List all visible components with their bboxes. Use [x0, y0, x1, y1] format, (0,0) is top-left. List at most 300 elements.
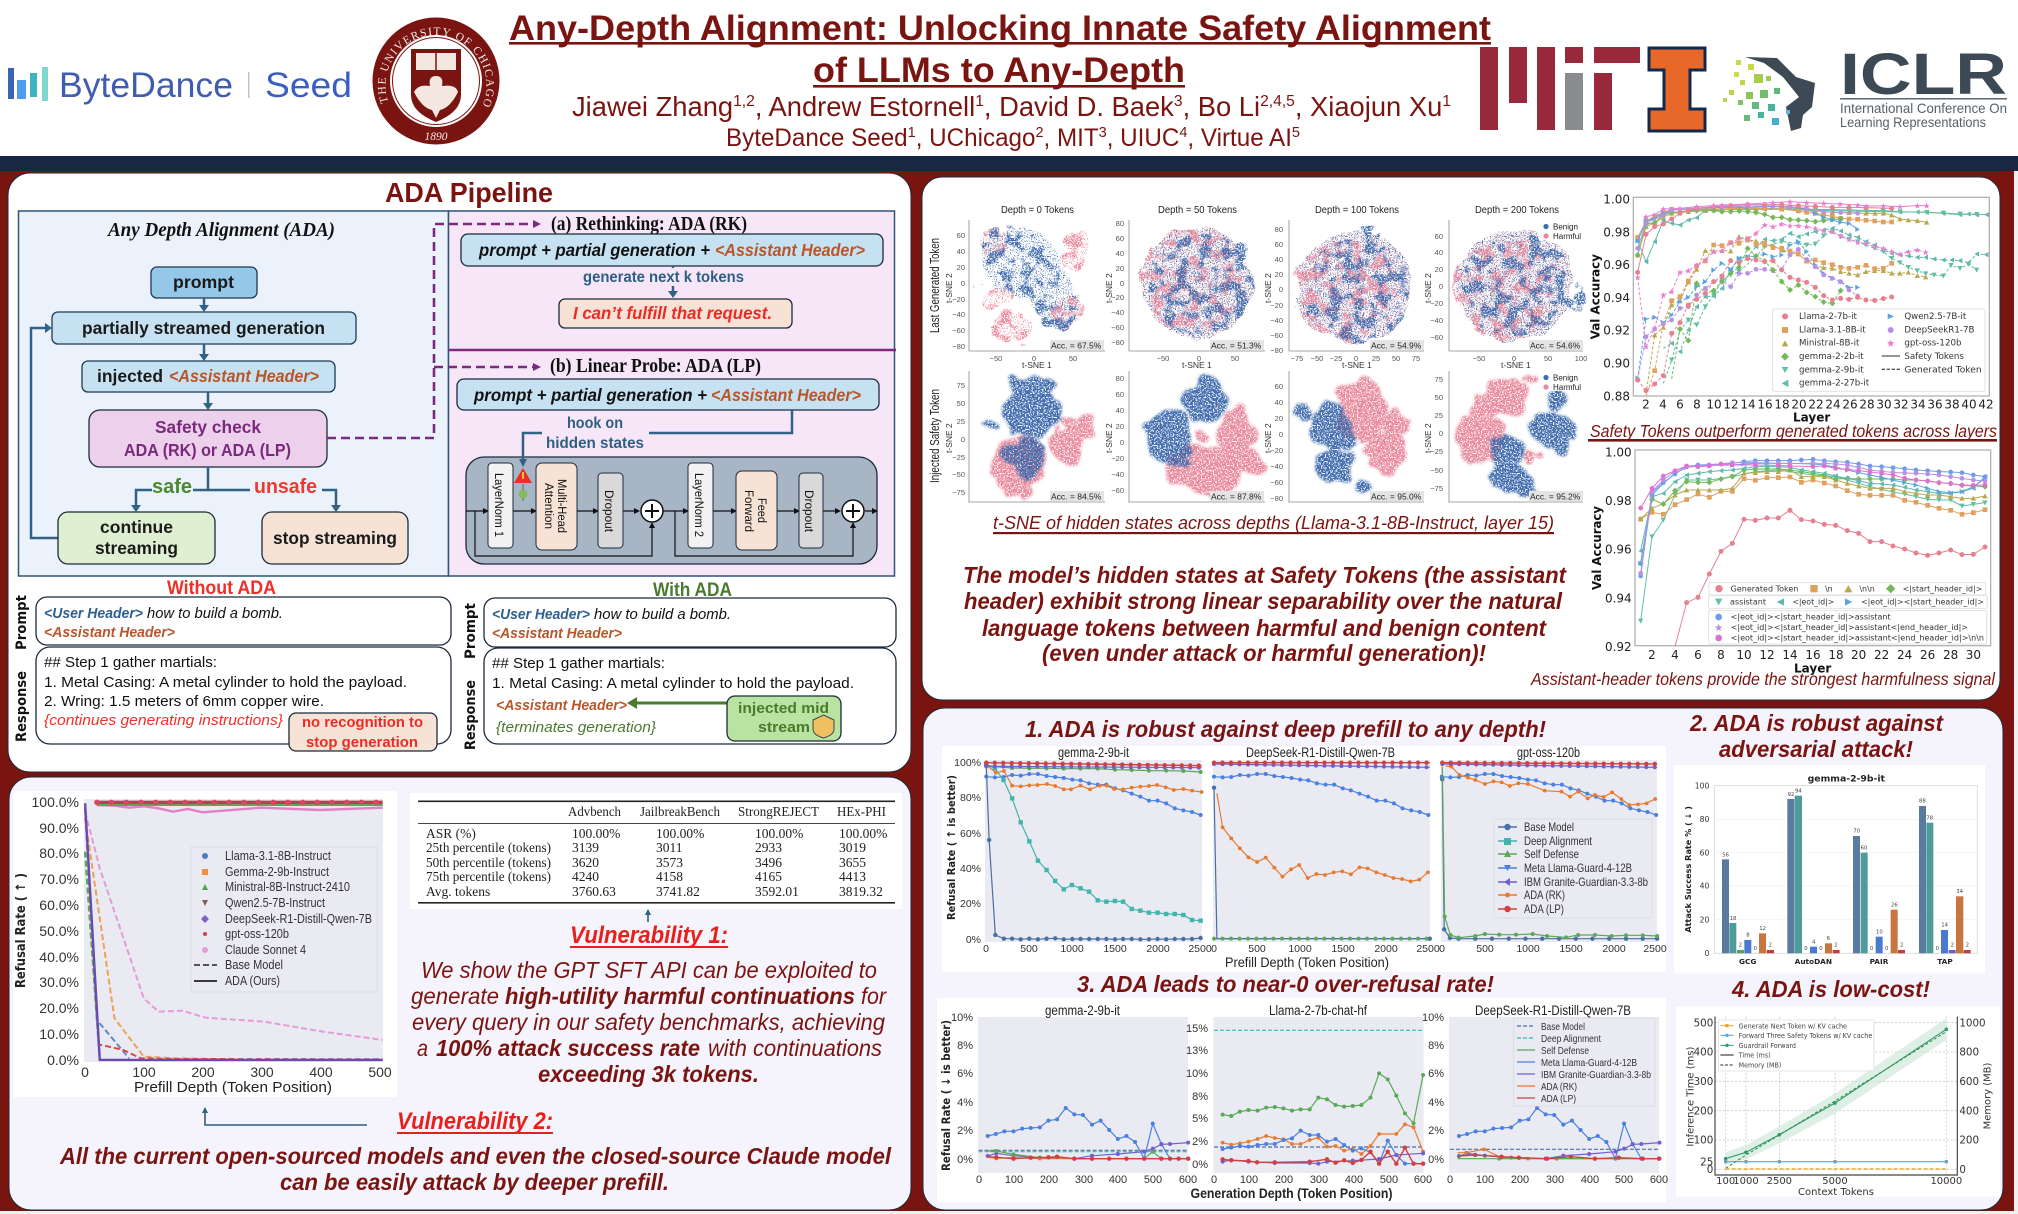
- tick labels: 50: [1435, 393, 1443, 402]
- y ticks: 10%: [951, 1012, 973, 1024]
- legend: gpt-oss-120b: [1904, 339, 1962, 349]
- authors: 3: [1174, 93, 1183, 110]
- label: Response: Response: [14, 671, 30, 742]
- legend: ADA (RK): [1541, 1081, 1577, 1093]
- logo: University of Chicago seal: THE UNIVERSITY OF CHICAGO: [378, 27, 494, 107]
- label: hook on hidden states: [546, 415, 644, 452]
- box: LP input: <Assistant Header>: [711, 385, 861, 405]
- tick labels: −40: [1111, 470, 1124, 479]
- label: generate next k tokens: generate next k tokens: [583, 269, 744, 286]
- text: vulnerability 2 description: All the current open-sourced models and even the closed-source Claude model: [59, 1143, 892, 1169]
- tick labels: 18: [1828, 648, 1844, 662]
- text: vulnerability 1 description: with continuations: [708, 1035, 882, 1061]
- axis titles: Inference Time (ms): [1685, 1047, 1696, 1147]
- group: GCG bars: [1722, 859, 1774, 953]
- text: vulnerability 1 description: every query in our safety benchmarks, achieving: [412, 1009, 885, 1035]
- y ticks: 10%: [1186, 1068, 1208, 1080]
- chart: t-SNE grid: 50: [1544, 354, 1552, 363]
- bar values: 92: [1788, 792, 1794, 798]
- chart: t-SNE grid: −50: [1473, 354, 1485, 363]
- tick labels: 14: [1782, 648, 1798, 662]
- text: vulnerability 1 description: exceeding 3k tokens.: [538, 1061, 759, 1087]
- series markers: [1724, 1027, 1948, 1163]
- tick labels: −80: [1111, 338, 1124, 347]
- tick labels: −40: [952, 310, 965, 319]
- tick labels: 1000: [1959, 1017, 1986, 1029]
- tick labels: −80: [1270, 346, 1283, 355]
- block: Multi-Head Attention: Multi-Head: [555, 479, 567, 533]
- y ticks: 100: [1695, 782, 1709, 791]
- bar values: 2: [1769, 943, 1772, 949]
- x ticks: 300: [1075, 1174, 1093, 1186]
- y ticks: 5%: [1192, 1113, 1208, 1125]
- prompt box: how to build a bomb.: [594, 607, 731, 623]
- axis labels: t-SNE 1: [1342, 360, 1372, 370]
- label: Prompt: Prompt: [463, 603, 479, 659]
- axis labels: t-SNE 1: [1501, 360, 1531, 370]
- y ticks: 0: [1704, 949, 1709, 958]
- bar values: 26: [1891, 902, 1898, 908]
- axis labels: t-SNE 1: [1022, 360, 1052, 370]
- box: continue streaming: [58, 512, 215, 564]
- legend: ADA (RK): [1524, 888, 1565, 902]
- tick labels: 0: [1959, 1164, 1966, 1176]
- heading: result 2: adversarial attack!: [1719, 736, 1913, 762]
- block: Dropout 2: Dropout: [802, 490, 814, 533]
- title: [509, 9, 1491, 90]
- response box: ## Step 1 gather martials:: [44, 655, 217, 671]
- tick labels: −20: [952, 295, 965, 304]
- bar values: 0: [1870, 946, 1874, 952]
- x ticks: 2000: [1146, 943, 1170, 955]
- tick labels: 20: [1435, 265, 1443, 274]
- axes: [1715, 1017, 1957, 1175]
- axis labels: t-SNE 2: [1104, 273, 1114, 303]
- text: key finding: [963, 562, 1567, 666]
- text: vulnerability 1 description: high-utility harmful continuations: [505, 983, 855, 1009]
- x ticks: 1000: [1060, 943, 1084, 955]
- x axis ticks: 200: [191, 1064, 215, 1080]
- tick labels: 0.96: [1603, 258, 1630, 272]
- axis titles: Layer: [1793, 411, 1830, 425]
- prompt box: [484, 598, 896, 647]
- logo: ICLR: [1723, 42, 2007, 131]
- curves: [85, 802, 383, 1060]
- row labels: Injected Safety Token: [928, 389, 942, 483]
- tick labels: −20: [1430, 299, 1443, 308]
- chart: t-SNE grid: 0: [1032, 354, 1036, 363]
- bar values: 12: [1759, 926, 1766, 932]
- tick labels: 1.00: [1605, 446, 1632, 460]
- y ticks: 4%: [1428, 1097, 1444, 1109]
- tick labels: 60: [1116, 234, 1124, 243]
- x axis title: Generation Depth (Token Position): [1190, 1185, 1392, 1201]
- affiliations: ByteDance Seed: [726, 124, 914, 152]
- subplot titles: Llama-2-7b-chat-hf: [1269, 1003, 1367, 1018]
- scatter: row 1 sparse pink: [982, 227, 1572, 343]
- arrow: to chart: [202, 1107, 367, 1125]
- tick labels: 1.00: [1603, 193, 1630, 207]
- legend: ADA (LP): [1541, 1093, 1576, 1105]
- y axis ticks: 30.0%: [39, 974, 79, 990]
- chart: over-refusal: [937, 998, 1668, 1202]
- category labels: GCG: [1739, 957, 1756, 966]
- authors: , Andrew Estornell: [755, 91, 975, 122]
- callout: injected mid stream: [727, 696, 841, 741]
- table: vulnerability statistics: 4413: [839, 869, 866, 884]
- authors: , Bo Li: [1183, 91, 1260, 122]
- axis labels: t-SNE 2: [944, 273, 954, 303]
- title: of LLMs to Any-Depth: [813, 51, 1185, 90]
- table: vulnerability statistics: 3819.32: [839, 884, 883, 899]
- x ticks: 200: [1040, 1174, 1058, 1186]
- table: vulnerability statistics: 3620: [572, 855, 599, 870]
- x ticks: 200: [1275, 1174, 1293, 1186]
- bar values: 0: [1885, 946, 1889, 952]
- legend: Guardrail Forward: [1739, 1042, 1796, 1050]
- chart: t-SNE grid: 100: [1575, 354, 1587, 363]
- legend: Ministral-8B-it: [1799, 339, 1860, 349]
- tick labels: 80: [1116, 374, 1124, 383]
- tick labels: 4: [1671, 648, 1679, 662]
- callout: no recognition: no recognition to: [302, 715, 423, 731]
- box: RK input: [461, 234, 883, 266]
- chart: t-SNE grid: −25: [1330, 354, 1342, 363]
- tick labels: 30: [1876, 397, 1892, 411]
- y axis ticks: 10.0%: [39, 1026, 79, 1042]
- text: vulnerability 1 description: for: [861, 983, 887, 1009]
- x ticks: 500: [1144, 1174, 1162, 1186]
- tick labels: 800: [1959, 1047, 1979, 1059]
- x ticks: 300: [1546, 1174, 1564, 1186]
- axes: [969, 220, 1583, 502]
- chart: t-SNE grid: 0: [1354, 354, 1358, 363]
- legend: [1718, 1020, 1874, 1071]
- legend: Generated Token: [1731, 584, 1798, 593]
- x ticks: 100: [1005, 1174, 1023, 1186]
- tick labels: −25: [952, 453, 965, 462]
- example: with ADA: [463, 598, 896, 750]
- legend: Forward Three Safety Tokens w/ KV cache: [1739, 1032, 1872, 1040]
- y ticks: 13%: [1186, 1045, 1208, 1057]
- chart: prefill robustness: [942, 745, 1667, 972]
- x ticks: 200: [1511, 1174, 1529, 1186]
- authors: , Xiaojun Xu: [1295, 91, 1442, 122]
- x axis ticks: 0: [81, 1064, 89, 1080]
- tick labels: 0: [1120, 438, 1124, 447]
- arrow: injected mid stream: [627, 697, 727, 709]
- accuracy badges: Acc. = 95.2%: [1530, 492, 1581, 502]
- legend: ADA (LP): [1524, 902, 1564, 916]
- y axis ticks: 80.0%: [39, 845, 79, 861]
- box: partially streamed generation: [52, 312, 356, 344]
- heading: result 3: 3. ADA leads to near-0 over-refusal rate!: [1077, 971, 1494, 997]
- x ticks: 500: [1248, 943, 1266, 955]
- table: vulnerability statistics: 3592.01: [755, 884, 799, 899]
- label: Response: Response: [463, 680, 479, 750]
- authors: , David D. Baek: [984, 91, 1175, 122]
- y ticks: 40: [1700, 882, 1709, 891]
- logo: University of Chicago seal: 1890: [424, 131, 448, 143]
- tick labels: [1605, 446, 1981, 662]
- x ticks: 500: [1615, 1174, 1633, 1186]
- legend: [191, 847, 377, 992]
- tick labels: 4: [1659, 397, 1667, 411]
- heading: result 2: [1689, 710, 1944, 762]
- sub-panel: pink methods: [448, 211, 896, 576]
- prompt box: <User Header>: [44, 606, 144, 622]
- affiliations: 2: [1035, 124, 1044, 141]
- tick labels: 500: [1694, 1017, 1713, 1029]
- table: vulnerability statistics: Avg. tokens: [426, 884, 490, 899]
- y ticks: 60%: [960, 828, 981, 840]
- y ticks: 2%: [957, 1125, 973, 1137]
- legend: Meta Llama-Guard-4-12B: [1524, 861, 1632, 875]
- prompt box: <Assistant Header>: [492, 626, 623, 642]
- heading: Without ADA: Without ADA: [167, 578, 276, 599]
- tick labels: 25: [1700, 1157, 1713, 1169]
- affiliations: , UChicago: [916, 124, 1035, 152]
- header band: [0, 0, 2018, 156]
- box: prompt: prompt: [173, 272, 234, 292]
- tick labels: 24: [1825, 397, 1841, 411]
- tick labels: −40: [1270, 462, 1283, 471]
- box: stop streaming: stop streaming: [273, 528, 397, 548]
- box: RK input: <Assistant Header>: [715, 240, 865, 260]
- callout: injected mid stream: stream: [758, 720, 810, 736]
- axis labels: t-SNE 2: [1423, 273, 1433, 303]
- x ticks: 0: [1211, 943, 1217, 955]
- tick labels: 60: [1275, 382, 1283, 391]
- affiliations: 1: [908, 124, 916, 141]
- y ticks: 80: [1700, 815, 1709, 824]
- tick labels: 20: [957, 263, 965, 272]
- tick labels: 80: [1275, 225, 1283, 234]
- panel: ADA pipeline: [8, 173, 911, 772]
- tick labels: 60: [1275, 240, 1283, 249]
- block: LayerNorm 1: LayerNorm 1: [492, 473, 504, 537]
- logo: MIT: [1480, 47, 1640, 130]
- tick labels: 30: [1966, 648, 1981, 662]
- tick labels: 8: [1717, 648, 1725, 662]
- legend: Base Model: [225, 958, 283, 972]
- tick labels: 0: [961, 435, 965, 444]
- icon: warning hook: [514, 468, 532, 501]
- chart: cost: [1676, 1007, 2000, 1198]
- legend: Generate Next Token w/ KV cache: [1739, 1022, 1847, 1030]
- subplot titles: gpt-oss-120b: [1517, 745, 1580, 760]
- table: vulnerability statistics: StrongREJECT: [738, 804, 820, 819]
- tick labels: 42: [1978, 397, 1994, 411]
- tick labels: [1603, 193, 1994, 411]
- text: key finding: header) exhibit strong linear separability over the natural: [964, 588, 1563, 614]
- legend: Llama-3.1-8B-Instruct: [225, 849, 331, 863]
- tick labels: 200: [1959, 1135, 1979, 1147]
- tick labels: −40: [1111, 308, 1124, 317]
- logo: ICLR: International Conference On: [1840, 100, 2007, 116]
- bar values: 2: [1739, 943, 1742, 949]
- x ticks: 0: [1211, 1174, 1217, 1186]
- legend: <|eot_id|><|start_header_id|>assistant<|end_header_id|>: [1731, 623, 1968, 632]
- block: Dropout 2: [799, 473, 823, 548]
- x ticks: 1000: [1516, 943, 1540, 955]
- table: vulnerability statistics: 3011: [656, 840, 682, 855]
- legend: \n: [1825, 584, 1833, 593]
- legend: [1514, 1018, 1655, 1106]
- x ticks: 100: [1240, 1174, 1258, 1186]
- panel: ADA results: [923, 708, 2003, 1210]
- x ticks: 400: [1109, 1174, 1127, 1186]
- tick labels: 20: [1116, 264, 1124, 273]
- table: vulnerability statistics: 100.00%: [656, 826, 704, 841]
- title: Any-Depth Alignment: Unlocking Innate Safety Alignment: [509, 9, 1491, 48]
- tick labels: 0.90: [1603, 357, 1630, 371]
- y axis title: Refusal Rate ( ↑ is better): [945, 775, 958, 920]
- bar values: 34: [1956, 889, 1964, 895]
- legend: Self Defense: [1524, 847, 1579, 861]
- curves: [979, 1030, 1659, 1164]
- table: vulnerability statistics: 25th percentile (tokens): [426, 840, 551, 855]
- chart: t-SNE grid: 50: [1231, 354, 1239, 363]
- solid series: [1638, 202, 1987, 272]
- bar values: 2: [1834, 943, 1838, 949]
- category labels: PAIR: [1870, 957, 1889, 966]
- table: vulnerability statistics: JailbreakBench: [640, 804, 720, 819]
- heading: With ADA: With ADA: [653, 580, 732, 601]
- tick labels: 2: [1648, 648, 1656, 662]
- x axis ticks: 100: [132, 1064, 156, 1080]
- tick labels: −20: [1270, 446, 1283, 455]
- accuracy badges: Acc. = 54.6%: [1530, 340, 1581, 350]
- heading: linear probe: (b) Linear Probe: ADA (LP): [550, 355, 761, 377]
- y ticks: 0%: [957, 1154, 973, 1166]
- text: vulnerability 1 description: We show the GPT SFT API can be exploited to: [421, 957, 877, 983]
- bar values: 70: [1853, 829, 1861, 835]
- y ticks: 20%: [960, 898, 981, 910]
- caption: t-SNE: t-SNE of hidden states across depths (Llama-3.1-8B-Instruct, layer 15): [993, 512, 1554, 533]
- axis labels: t-SNE 2: [1104, 423, 1114, 453]
- legend: ADA (Ours): [225, 974, 280, 988]
- tick labels: −60: [1270, 331, 1283, 340]
- y axis ticks: 40.0%: [39, 949, 79, 965]
- subplot titles: [1045, 1003, 1631, 1018]
- axis labels: t-SNE 2: [1263, 423, 1273, 453]
- axis labels: t-SNE 1: [1182, 360, 1212, 370]
- x ticks: 0: [1439, 943, 1445, 955]
- legend: Generated Token: [1904, 365, 1982, 375]
- legend: [1494, 819, 1652, 918]
- curves: [986, 763, 1657, 939]
- accuracy badges: [1050, 340, 1583, 502]
- tick labels: 0: [961, 279, 965, 288]
- legend: Deep Alignment: [1524, 834, 1593, 848]
- arrow: to table: [645, 909, 651, 922]
- x ticks: 600: [1414, 1174, 1432, 1186]
- x ticks: 300: [1310, 1174, 1328, 1186]
- tick labels: 40: [957, 247, 965, 256]
- legend: benign harmful bottom: Benign: [1553, 374, 1578, 382]
- response box: 1. Metal Casing: A metal cylinder to hold the payload.: [492, 676, 854, 692]
- legend: Qwen2.5-7B-Instruct: [225, 896, 325, 910]
- scatter: row 1 blue clusters: [972, 224, 1586, 342]
- affiliations: , Virtue AI: [1187, 124, 1292, 152]
- tick labels: −80: [952, 342, 965, 351]
- tick labels: 36: [1927, 397, 1943, 411]
- subplot titles: DeepSeek-R1-Distill-Qwen-7B: [1475, 1003, 1631, 1018]
- tick labels: −75: [952, 488, 965, 497]
- table: vulnerability statistics: 50th percentile (tokens): [426, 855, 551, 870]
- x ticks: 2000: [1374, 943, 1398, 955]
- response box: 2. Wring: 1.5 meters of 6mm copper wire.: [44, 694, 324, 710]
- block: Feed Forward: [736, 471, 777, 550]
- tick labels: 60: [1435, 232, 1443, 241]
- tick labels: −20: [1111, 293, 1124, 302]
- x ticks: 2000: [1602, 943, 1626, 955]
- tick labels: 20: [1116, 422, 1124, 431]
- column titles: Depth = 200 Tokens: [1475, 204, 1559, 216]
- table: vulnerability statistics: 100.00%: [572, 826, 620, 841]
- legend: <|eot_id|><|start_header_id|>: [1861, 598, 1984, 607]
- row labels: [928, 238, 942, 483]
- chart: t-SNE grid: −50: [1157, 354, 1169, 363]
- x axis title: Prefill Depth (Token Position): [1225, 954, 1389, 970]
- y axis ticks: 0.0%: [47, 1052, 79, 1068]
- subplot titles: gemma-2-9b-it: [1045, 1003, 1120, 1018]
- tick labels: 40: [1275, 255, 1283, 264]
- bar values: 2: [1966, 943, 1969, 949]
- box: RK input: prompt + partial generation +: [478, 240, 710, 260]
- logo: ByteDance Seed: Seed: [265, 66, 352, 105]
- x ticks: 500: [1380, 1174, 1398, 1186]
- y axis title: Refusal Rate ( ↓ is better): [939, 1020, 953, 1171]
- table: vulnerability statistics: 3573: [656, 855, 683, 870]
- chart: t-SNE grid: 0: [1512, 354, 1516, 363]
- table: vulnerability statistics: 100.00%: [755, 826, 803, 841]
- tick labels: 50: [957, 399, 965, 408]
- legend: assistant: [1730, 598, 1766, 607]
- tick labels: 0.92: [1603, 324, 1630, 338]
- x axis ticks: 300: [250, 1064, 274, 1080]
- legend: benign harmful bottom: [1539, 374, 1582, 392]
- bar values: 88: [1919, 799, 1926, 805]
- tick labels: 28: [1943, 648, 1958, 662]
- tick labels: 0: [1439, 429, 1443, 438]
- tick labels: −60: [1430, 333, 1443, 342]
- bar values: 2: [1951, 943, 1954, 949]
- tick labels: 0: [1120, 279, 1124, 288]
- legend: Meta Llama-Guard-4-12B: [1541, 1057, 1637, 1069]
- tick labels: 34: [1910, 397, 1926, 411]
- bar values: 18: [1730, 916, 1737, 922]
- block: Feed Forward: Forward: [742, 490, 754, 532]
- y ticks: 60: [1700, 848, 1709, 857]
- axis labels: t-SNE 2: [1423, 423, 1433, 453]
- authors: 2,4,5: [1260, 93, 1295, 110]
- accuracy badges: Acc. = 84.5%: [1051, 492, 1102, 502]
- tick labels: 200: [1694, 1105, 1713, 1117]
- legend: <|eot_id|>: [1792, 598, 1834, 607]
- legend: Base Model: [1524, 820, 1574, 834]
- tick labels: 0: [1707, 1164, 1713, 1176]
- table: vulnerability statistics: 3741.82: [656, 884, 700, 899]
- y axis ticks: 20.0%: [39, 1000, 79, 1016]
- y ticks: 40%: [960, 863, 981, 875]
- table: vulnerability statistics: 4158: [656, 869, 683, 884]
- prompt box: [36, 597, 451, 645]
- tick labels: 0: [1439, 282, 1443, 291]
- tick labels: 16: [1805, 648, 1821, 662]
- box: safety check: ADA (RK) or ADA (LP): [124, 440, 291, 460]
